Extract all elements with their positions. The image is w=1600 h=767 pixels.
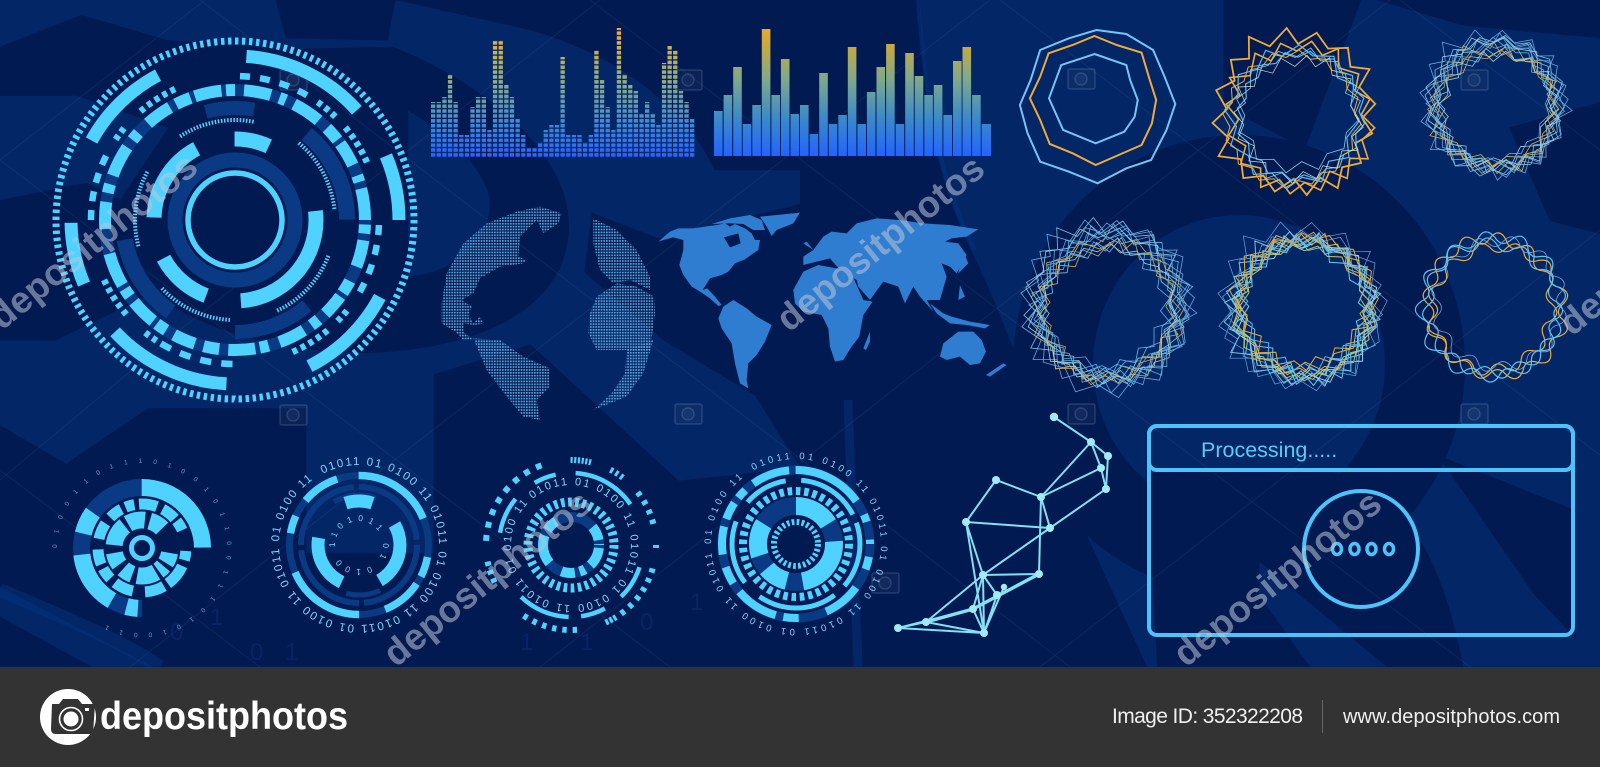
- progress circle: [1304, 491, 1418, 607]
- eurasia: [803, 218, 978, 312]
- logo wordmark: depositphotos: [100, 695, 348, 738]
- faint binary digits: 1: [520, 629, 533, 656]
- tick ring: [528, 502, 614, 588]
- outer binary text: 01011 01 0100 11 01011 01 0100 11 01011 01 0100 11 01011 01 0100 11: [271, 457, 447, 633]
- outer square dashes: [486, 460, 656, 630]
- islands of southeast asia: [930, 303, 990, 328]
- dial 1: [52, 458, 232, 638]
- wave ring 4: [999, 196, 1224, 424]
- dotted globe: [442, 207, 655, 420]
- dark rings: [290, 476, 428, 614]
- wave ring 6: [1394, 216, 1584, 403]
- solid bar chart: [714, 29, 991, 156]
- header bar: [1149, 426, 1573, 470]
- centre ring: [123, 529, 161, 567]
- watermark text: depositphotos: [768, 147, 992, 339]
- nodes: [894, 413, 1112, 637]
- dark inner rings: [105, 90, 365, 350]
- watermark cameras: [280, 69, 1488, 593]
- wave ring 3: [1402, 10, 1596, 203]
- inner ticks: [768, 516, 824, 572]
- watermark text: depositphotos: [1165, 482, 1389, 674]
- wedges: [758, 506, 834, 582]
- dark rings: [722, 470, 870, 618]
- inner bright arcs: [154, 139, 316, 301]
- network constellation: [894, 413, 1112, 637]
- dial 3: [483, 457, 659, 633]
- processing window: [1149, 426, 1573, 635]
- inner ring: [543, 517, 599, 573]
- footer bar: [0, 667, 1600, 767]
- faint binary digits: 1: [690, 589, 703, 616]
- faint binary digits: 0: [170, 619, 183, 646]
- faint binary digits: 1: [210, 604, 223, 631]
- logo: camera badge: [40, 689, 96, 745]
- lighter crescent beside dial: [408, 111, 490, 276]
- square dash groups: [91, 76, 379, 364]
- hudson bay: [724, 233, 741, 247]
- website: www.depositphotos.com: [1342, 706, 1560, 728]
- greenland: [760, 213, 800, 236]
- faint binary digits: 1: [285, 639, 298, 666]
- africa: [588, 283, 655, 350]
- australia: [940, 332, 986, 365]
- north america: [442, 207, 562, 340]
- binary text: 01011 01 0100 11 01011 01 0100 11 01011 01 0100 11: [503, 478, 638, 612]
- tick ring: [743, 491, 849, 597]
- south america: [718, 300, 772, 388]
- outer tick ring: [56, 41, 414, 399]
- south america: [473, 338, 550, 420]
- binary ring: 0 1 0 0 1 1 0 1 1 1 0 1 0 0 1 0 1 1 0 0 1 1 1 0 1 0 1 0 0 1 1: [52, 458, 232, 638]
- southern crescent: [593, 340, 653, 410]
- faint binary digits: 0: [640, 609, 653, 636]
- africa: [793, 265, 873, 362]
- wave ring 1: [1020, 30, 1175, 183]
- middle segments: [98, 504, 186, 592]
- dial 4: [704, 452, 888, 636]
- inner segments: [114, 520, 170, 576]
- wave ring 5: [1197, 202, 1412, 416]
- main HUD radial dial: [56, 41, 414, 399]
- dotted arcs: [135, 120, 335, 320]
- connecting lines: [898, 417, 1108, 633]
- outer arcs: [290, 476, 428, 614]
- loading dots: [1332, 544, 1394, 554]
- faint binary digits: [170, 589, 703, 666]
- new zealand: [986, 363, 1007, 377]
- image id: Image ID: 352322208: [1112, 705, 1303, 728]
- thin arcs: [499, 473, 643, 617]
- thin arcs: [732, 480, 860, 608]
- processing label: Processing.....: [1201, 438, 1337, 462]
- faint binary digits: 0: [250, 639, 263, 666]
- europe and asia: [593, 218, 650, 290]
- dark backing arcs: [82, 488, 202, 608]
- centre ring: [188, 173, 282, 267]
- inner binary text: 01011 01 0100 11: [329, 515, 389, 575]
- window frame: [1149, 426, 1573, 635]
- outer segments: [722, 470, 870, 618]
- arctic islands: [712, 215, 765, 230]
- outer arcs: [82, 488, 202, 608]
- world map: [658, 213, 1007, 388]
- thick outer arcs: [71, 56, 399, 384]
- binary text: 01011 01 0100 11 01011 01 0100 11 01011 01 0100 11 01011 01 0100 11: [704, 452, 888, 636]
- dial 2: [271, 457, 447, 633]
- north america: [658, 223, 760, 306]
- inner arcs: [315, 501, 403, 589]
- madagascar: [863, 332, 870, 350]
- watermark text: depositphotos: [375, 482, 599, 674]
- watermark text: [0, 145, 1600, 674]
- wave ring 2: [1195, 15, 1392, 216]
- dotted equalizer chart: [431, 28, 694, 158]
- segmented ring: [105, 90, 365, 350]
- faint binary digits: 1: [580, 629, 593, 656]
